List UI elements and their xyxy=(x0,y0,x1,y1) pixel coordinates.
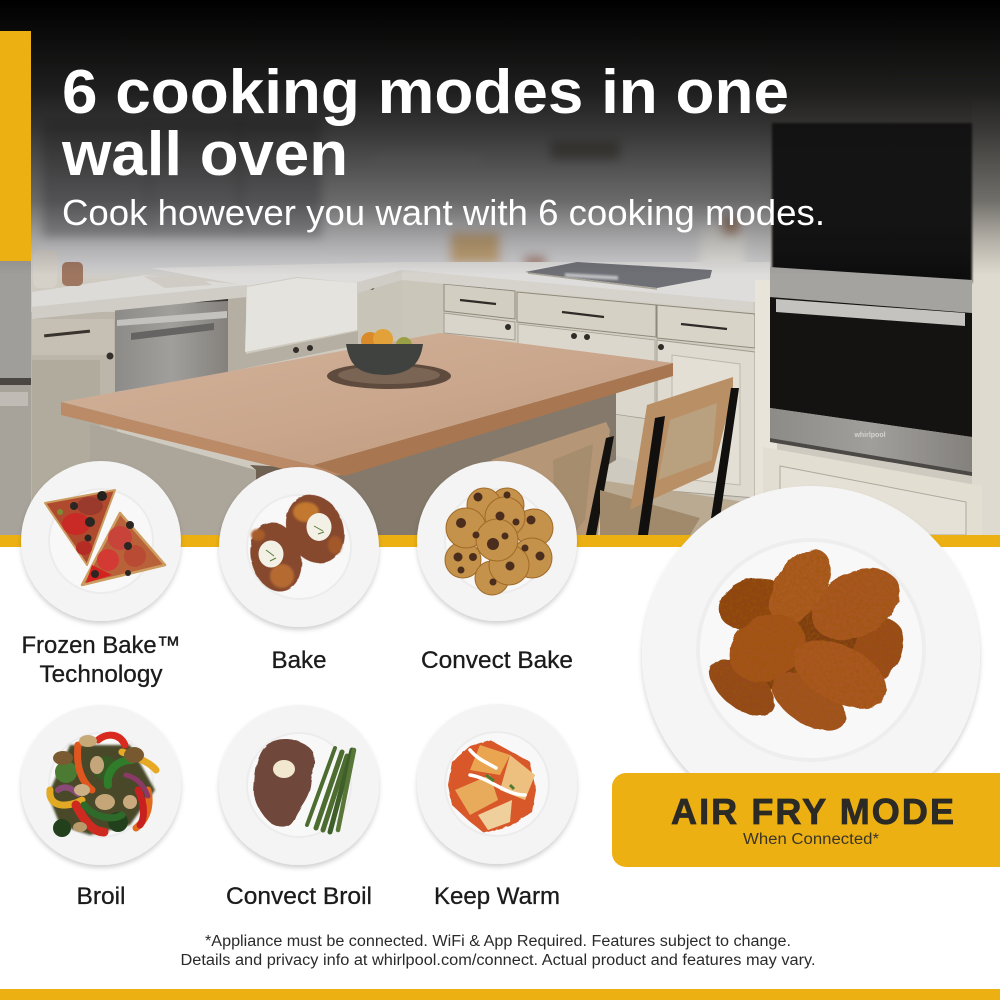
pizza slice one xyxy=(45,490,115,565)
plate: keep warm enchiladas xyxy=(417,704,577,864)
farmhouse sink xyxy=(245,278,357,352)
dark top gradient xyxy=(0,0,1000,275)
title: 6 cooking modes in one xyxy=(62,58,789,127)
plate: frozen bake pizza xyxy=(21,461,181,621)
back right cabinets xyxy=(444,282,757,500)
butter pat xyxy=(273,760,295,778)
fridge at left edge xyxy=(0,261,31,535)
footnote: *Appliance must be connected. WiFi & App Required. Features subject to change. xyxy=(205,933,791,950)
air fry mode banner xyxy=(612,773,1000,867)
photo: kitchen scene xyxy=(0,0,1000,535)
mode labels xyxy=(22,632,573,910)
yellow band xyxy=(0,535,1000,547)
title: wall oven xyxy=(61,120,348,189)
small clay bowls xyxy=(33,250,83,288)
label: technology: Technology xyxy=(40,661,162,688)
gas cooktop xyxy=(525,262,712,289)
banner heading: AIR FRY MODE xyxy=(671,791,954,832)
label: convect bake: Convect Bake xyxy=(421,647,573,674)
yellow accent block xyxy=(0,31,31,261)
asparagus xyxy=(307,748,354,832)
plate: broil vegetables xyxy=(21,705,181,865)
dishwasher xyxy=(115,298,228,392)
potato two xyxy=(276,486,354,572)
banner note: When Connected* xyxy=(743,831,879,848)
left base cabinets xyxy=(31,312,117,535)
label: broil: Broil xyxy=(76,883,126,910)
yellow footer band xyxy=(0,989,1000,1000)
plate: convect broil steak xyxy=(219,705,379,865)
cabinets under and around the sink xyxy=(228,275,444,372)
title xyxy=(61,58,789,189)
island wood countertop xyxy=(61,333,673,476)
fried wings xyxy=(699,539,915,742)
cookie pile xyxy=(445,488,553,595)
footnote: Details and privacy info at whirlpool.com/connect. Actual product and features may vary. xyxy=(180,952,816,969)
steak xyxy=(254,739,315,827)
floor xyxy=(600,480,765,535)
fruit bowl on trivet xyxy=(327,329,451,389)
label: bake: Bake xyxy=(272,647,326,674)
plate: cookies xyxy=(417,461,577,621)
wall oven: whirlpool xyxy=(853,432,886,439)
lower cabinet under wall oven xyxy=(755,100,1000,535)
enchilada dish xyxy=(448,740,536,833)
label: frozen bake: Frozen Bake™ xyxy=(22,632,180,659)
label: convect broil: Convect Broil xyxy=(226,883,372,910)
potato one xyxy=(243,517,309,597)
vegetable mix xyxy=(48,735,156,837)
pizza slice two xyxy=(82,513,165,585)
wall oven xyxy=(770,123,972,476)
white countertops xyxy=(32,262,770,319)
subtitle: Cook however you want with 6 cooking modes. xyxy=(62,192,825,233)
plate: air fry wings xyxy=(642,486,980,824)
wooden chairs xyxy=(491,377,739,535)
kitchen island base xyxy=(90,392,616,535)
label: keep warm: Keep Warm xyxy=(434,883,560,910)
plate: baked potatoes xyxy=(219,467,379,627)
footnote xyxy=(180,933,816,969)
back wall and upper cabinets, blurred xyxy=(31,60,771,290)
